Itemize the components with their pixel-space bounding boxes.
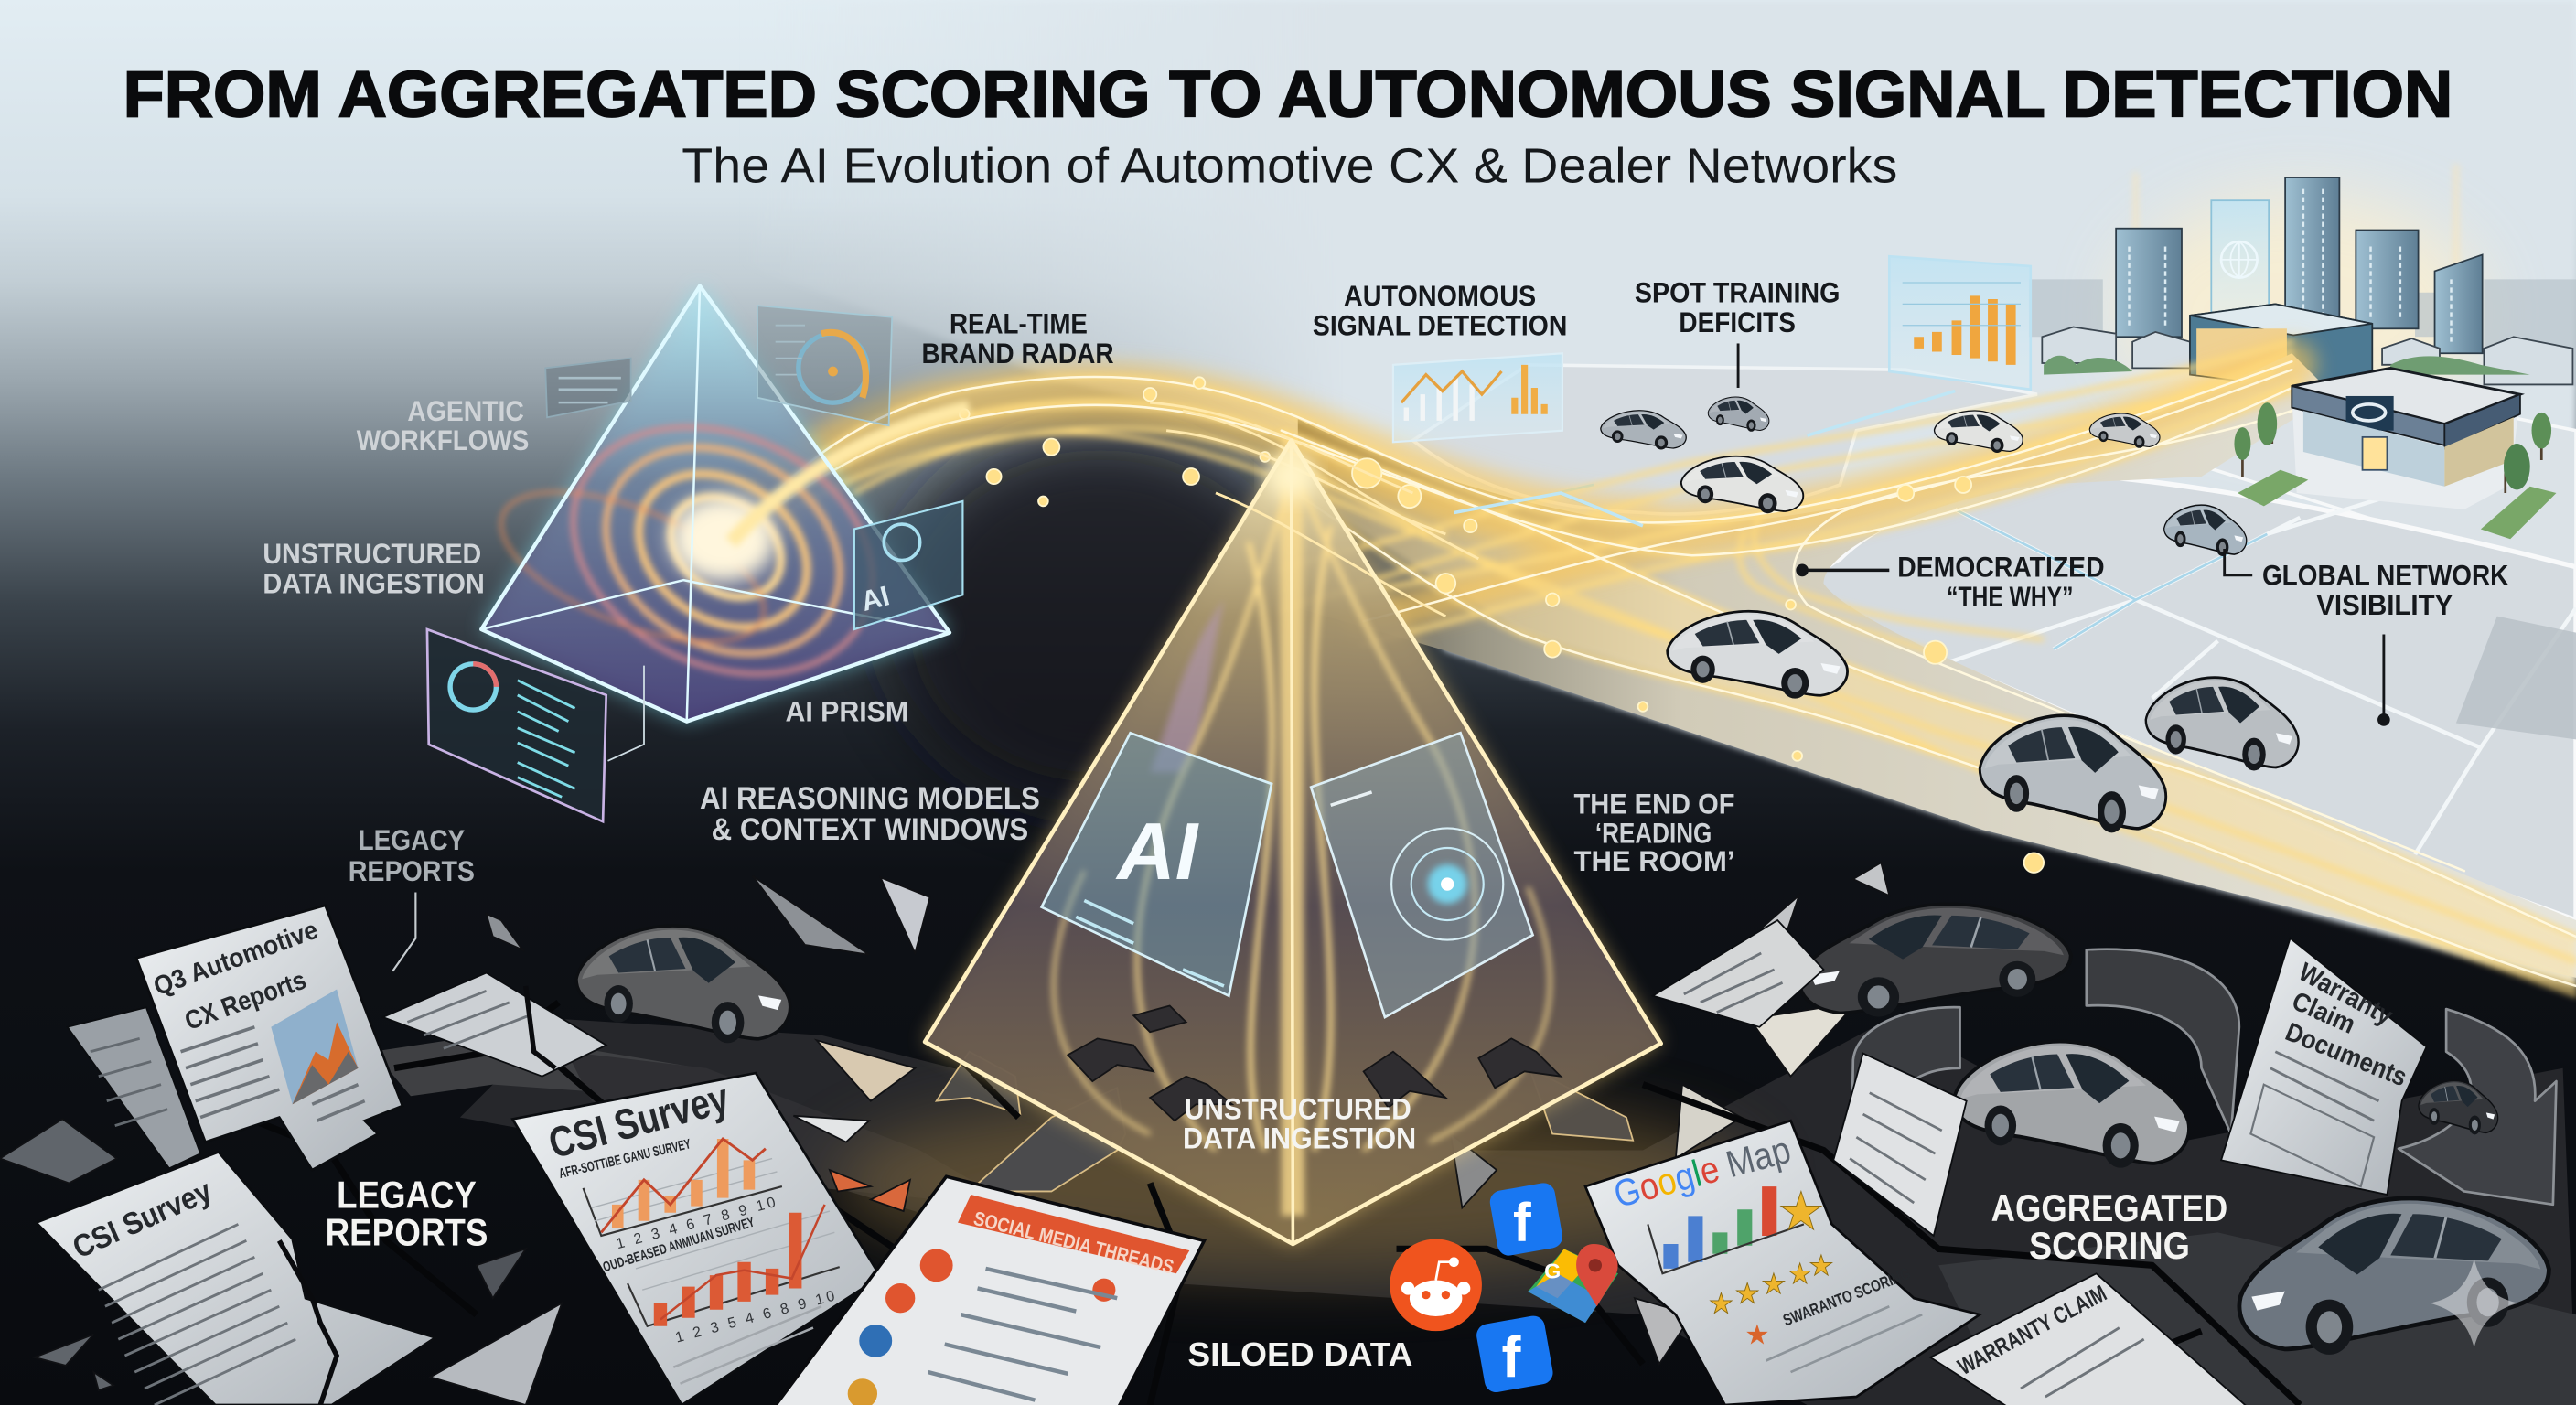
panel: center prism — [925, 402, 1661, 1244]
road surface — [1298, 353, 2576, 978]
label: real-time brand radar: REAL-TIME — [950, 308, 1088, 340]
label: democratized the why: DEMOCRATIZED — [1897, 552, 2105, 584]
watermark star — [2430, 1259, 2518, 1347]
document: warranty claim documents: Claim — [2288, 986, 2359, 1040]
light streams — [731, 342, 2576, 994]
label: aggregated scoring: SCORING — [2029, 1225, 2190, 1267]
rubble field — [0, 863, 2576, 1405]
document: q3 automotive cx reports: CX Reports — [181, 966, 310, 1036]
icon: review stars: ★ — [1777, 1183, 1825, 1241]
shards — [0, 863, 1889, 1405]
icon: review stars: ★ — [1761, 1269, 1787, 1300]
label: legacy reports, upper: LEGACY — [359, 824, 465, 856]
holo panel: ai: AI — [1115, 806, 1199, 896]
icon: facebook top — [1488, 1181, 1564, 1258]
car: dark left — [576, 926, 790, 1043]
document: q3 automotive cx reports: Q3 Automotive — [150, 916, 322, 1002]
chart: top survey: 1 2 3 4 6 7 8 9 10 — [615, 1194, 778, 1252]
label: ai reasoning models and context windows — [700, 781, 1040, 847]
holo panel: lower left dashboard — [427, 629, 606, 821]
icon: facebook bottom: f — [1501, 1325, 1521, 1389]
label: global network visibility: GLOBAL NETWORK — [2262, 560, 2509, 592]
network grid lines — [1938, 493, 2576, 854]
icon: globe tower — [2211, 200, 2269, 319]
icon: facebook top: f — [1513, 1191, 1531, 1252]
strands crossing prism apex — [1150, 402, 1478, 617]
chart: bottom survey: 1 2 3 5 4 6 8 9 10 — [673, 1288, 836, 1346]
label: spot training deficits — [1635, 277, 1840, 338]
panel: ai prism — [427, 286, 970, 821]
chart panel: spot training deficits — [1889, 256, 2031, 390]
dealership showroom — [2234, 368, 2556, 539]
dark ground patches — [460, 1019, 2576, 1405]
prism glow — [925, 440, 1661, 1244]
label: agentic workflows — [357, 395, 529, 456]
prism halo — [481, 286, 950, 722]
label: agentic workflows: WORKFLOWS — [357, 424, 529, 456]
document: warranty claim documents: Warranty — [2293, 958, 2398, 1031]
document: google map review: Google Map — [1609, 1129, 1795, 1216]
icon: review stars: ★ — [1787, 1259, 1812, 1290]
prism edges — [925, 440, 1661, 1244]
label: spot training deficits: SPOT TRAINING — [1635, 277, 1840, 309]
icon: review stars: ★ — [1734, 1279, 1760, 1310]
low buildings — [2042, 327, 2572, 384]
leader lines — [1738, 343, 2388, 724]
label: global network visibility — [2262, 560, 2509, 621]
prism body — [925, 440, 1661, 1244]
document: warranty claim bottom: WARRANTY CLAIM — [1954, 1281, 2111, 1380]
holo panel: ai — [1042, 733, 1272, 996]
warm glow behind city — [2120, 198, 2481, 427]
label: aggregated scoring: AGGREGATED — [1991, 1187, 2227, 1229]
cars: dark right group — [1799, 904, 2549, 1355]
label: unstructured data ingestion, left: DATA INGESTION — [263, 568, 485, 600]
label: ai reasoning models and context windows: AI REASONING MODELS — [700, 781, 1040, 816]
icon: review stars — [1709, 1183, 1834, 1319]
label: unstructured data ingestion, center: DATA INGESTION — [1183, 1122, 1416, 1155]
holo panel: top right radar — [757, 306, 892, 425]
bar chart: google — [1670, 1186, 1769, 1269]
label: agentic workflows: AGENTIC — [407, 395, 524, 427]
label: ai prism: AI PRISM — [785, 696, 908, 728]
label: legacy reports, lower: REPORTS — [326, 1212, 488, 1254]
document: back page — [68, 1007, 200, 1168]
label: aggregated scoring — [1991, 1187, 2227, 1267]
prism body — [481, 286, 950, 722]
prism rubble fragments — [1068, 1005, 1561, 1121]
label: siloed data: SILOED DATA — [1187, 1335, 1412, 1373]
city skyline — [2029, 165, 2576, 388]
label: spot training deficits: DEFICITS — [1679, 306, 1796, 338]
document: csi survey left — [37, 1152, 435, 1405]
icon: google maps — [1528, 1244, 1618, 1323]
label: the end of reading the room: THE ROOM’ — [1573, 845, 1734, 877]
warm light on ground near prism — [833, 1093, 1753, 1273]
document: torn page centre left — [382, 973, 606, 1077]
road connector glow lines — [1454, 391, 1955, 526]
document: warranty claim documents: Documents — [2281, 1017, 2411, 1092]
apex flare — [1268, 454, 1315, 499]
label: global network visibility: VISIBILITY — [2316, 589, 2453, 621]
holo panel: top left — [545, 359, 631, 417]
chart panel: autonomous signal detection — [1393, 353, 1562, 442]
rising strands — [1054, 460, 1550, 1216]
document: google map review — [1585, 1121, 1980, 1405]
label: democratized the why: “THE WHY” — [1947, 581, 2073, 613]
purple wisp — [1150, 600, 1224, 772]
holo panel: signal dial — [1311, 733, 1533, 1017]
stream bright strands — [731, 342, 2576, 994]
label: legacy reports, lower — [326, 1174, 488, 1254]
document: csi survey left: CSI Survey — [68, 1174, 217, 1265]
chart: top survey — [584, 1139, 782, 1252]
label: legacy reports, upper — [349, 824, 475, 887]
road gold band — [1282, 431, 2576, 986]
label: real-time brand radar: BRAND RADAR — [922, 338, 1114, 370]
leader line: ai prism — [607, 666, 644, 761]
document: google map review: SWARANTO SCORING — [1780, 1264, 1913, 1330]
document: small survey page — [1833, 1054, 1967, 1236]
label: autonomous signal detection — [1313, 280, 1567, 341]
document: csi survey main: CSI Survey — [543, 1074, 734, 1167]
document: csi survey main — [512, 1073, 881, 1405]
label: legacy reports, lower: LEGACY — [337, 1174, 477, 1216]
icon: facebook bottom — [1475, 1314, 1555, 1394]
document: warranty claim bottom — [1930, 1273, 2250, 1405]
label: unstructured data ingestion, left — [263, 538, 485, 600]
leader line: legacy reports — [392, 892, 415, 971]
title: FROM AGGREGATED SCORING TO AUTONOMOUS SIGNAL DETECTION — [123, 59, 2453, 132]
plot: upper left road block — [1412, 365, 2037, 514]
label: unstructured data ingestion, center — [1183, 1092, 1416, 1155]
car: bright traffic group — [1601, 397, 2299, 832]
dealership plot — [2210, 394, 2576, 567]
cracks — [213, 1003, 2300, 1405]
glass hub building — [2190, 304, 2372, 388]
label: the end of reading the room — [1573, 788, 1734, 877]
holo panel: right ai — [854, 501, 962, 629]
silo walls — [1852, 949, 2556, 1205]
label: the end of reading the room: ‘READING — [1595, 818, 1712, 850]
subtitle: The AI Evolution of Automotive CX & Dealer Networks — [682, 138, 1897, 193]
label: autonomous signal detection: AUTONOMOUS — [1344, 280, 1536, 312]
label: unstructured data ingestion, center: UNSTRUCTURED — [1185, 1092, 1411, 1125]
document: top right small page — [1653, 920, 1823, 1027]
prism edges — [481, 286, 950, 722]
label: the end of reading the room: THE END OF — [1573, 788, 1734, 820]
stream glow — [731, 365, 2292, 621]
stream from core — [731, 408, 970, 542]
icon: review stars: ★ — [1709, 1288, 1733, 1319]
label: ai reasoning models and context windows: & CONTEXT WINDOWS — [712, 812, 1028, 847]
label: autonomous signal detection: SIGNAL DETECTION — [1313, 309, 1567, 341]
label: legacy reports, upper: REPORTS — [349, 855, 475, 887]
label: unstructured data ingestion, left: UNSTRUCTURED — [263, 538, 481, 570]
stream white core strands — [731, 361, 2576, 986]
holo panel: right ai: AI — [858, 580, 893, 617]
document: csi survey main: AFR-SOTTIBE GANU SURVEY — [557, 1136, 692, 1182]
prism spiral — [481, 381, 913, 721]
label: real-time brand radar — [922, 308, 1114, 370]
light ground haze — [739, 0, 2576, 986]
plot: network grid block — [1815, 473, 2576, 920]
document: csi survey main: OUD-BEASED ANMIUAN SURVEY — [601, 1215, 757, 1275]
icon: review stars: ★ — [1809, 1250, 1834, 1282]
icon: reddit — [1390, 1239, 1482, 1331]
document: q3 automotive cx reports — [136, 906, 402, 1170]
chart: bottom survey — [628, 1205, 840, 1346]
light orbs — [960, 377, 2044, 873]
label: democratized the why — [1897, 552, 2105, 613]
icon: google maps: G — [1544, 1260, 1561, 1283]
document: google map review: ★ — [1744, 1320, 1770, 1351]
document: social media threads — [772, 1176, 1204, 1405]
document: warranty claim documents — [2221, 938, 2427, 1195]
document: social media threads: SOCIAL MEDIA THREADS — [971, 1207, 1176, 1279]
prism core light — [671, 497, 776, 582]
dark void between prisms — [887, 427, 1315, 805]
